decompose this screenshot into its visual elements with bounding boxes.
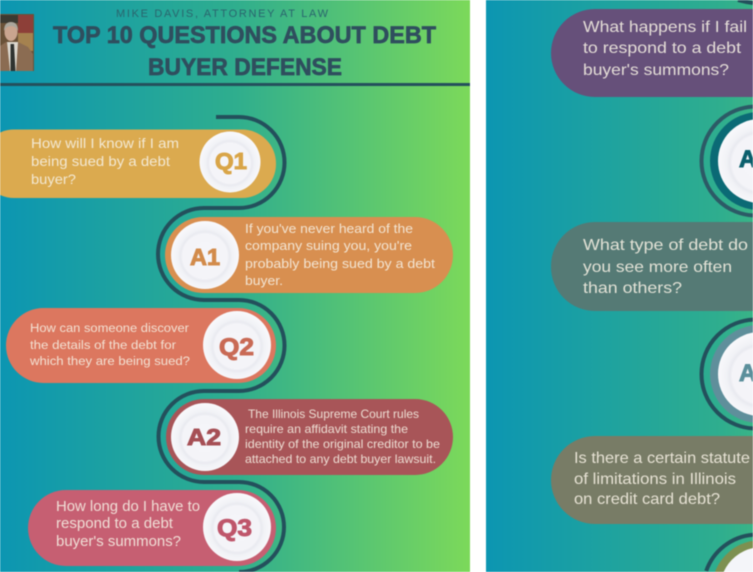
card: A2: A2: [187, 424, 221, 450]
badge: A3 answer circle: [702, 106, 753, 216]
card: Q6 question: Is there a certain statute: [574, 450, 750, 467]
card: A1: If you've never heard of the: [245, 221, 413, 236]
photo: attorney portrait: [0, 14, 34, 71]
card: Q1: How will I know if I am: [31, 135, 179, 151]
connector: winding line: [158, 117, 284, 572]
card: Q2: [6, 308, 276, 383]
card: Q2: Q2: [219, 334, 254, 361]
card: A1: A1: [190, 244, 220, 270]
card: Q6 question: of limitations in Illinois: [574, 471, 736, 488]
card: Q3: buyer's summons?: [56, 534, 181, 550]
title: [53, 22, 436, 81]
card: Q5 question: you see more often: [583, 259, 732, 276]
card: Q1: being sued by a debt: [31, 153, 170, 169]
card: Q1: [0, 130, 276, 198]
card: Q2: How can someone discover: [30, 321, 189, 335]
card: Q3: Q3: [217, 515, 252, 542]
card: A2: The Illinois Supreme Court rules: [248, 408, 419, 421]
card: Q6 question: [551, 436, 753, 524]
card: Q2: the details of the debt for: [30, 338, 176, 352]
card: Q5 question: than others?: [583, 280, 682, 297]
badge: A4 answer circle: [702, 320, 753, 428]
card: Q4 question: to respond to a debt: [583, 40, 742, 57]
card: Q6 question: on credit card debt?: [574, 491, 720, 508]
card: Q2: which they are being sued?: [29, 354, 190, 368]
card: A1: company suing you, you're: [245, 238, 412, 253]
card: Q3: respond to a debt: [56, 516, 173, 532]
header: attorney name: MIKE DAVIS, ATTORNEY AT LAW: [116, 8, 329, 20]
card: Q4 question: What happens if I fail: [583, 19, 747, 36]
card: Q4 question: [551, 9, 753, 97]
connector: top right curve: [738, 0, 753, 3]
card: A2: require an affidavit stating the: [245, 423, 408, 436]
card: A1: [165, 217, 453, 293]
card: Q1: buyer?: [31, 171, 76, 187]
card: A2: identity of the original creditor to be: [245, 438, 440, 451]
badge: A5 answer circle: [706, 535, 753, 572]
title: BUYER DEFENSE: [148, 54, 342, 81]
card: Q5 question: What type of debt do: [583, 237, 748, 254]
panel: right infographic background: [486, 0, 753, 572]
title: TOP 10 QUESTIONS ABOUT DEBT: [53, 22, 436, 49]
card: A1: buyer.: [245, 273, 283, 288]
card: Q3: How long do I have to: [56, 499, 200, 515]
card: A1: probably being sued by a debt: [245, 256, 435, 271]
card: Q5 question: [551, 222, 753, 311]
card: Q1: Q1: [215, 148, 247, 174]
card: Q4 question: buyer's summons?: [583, 62, 729, 79]
card: A2: attached to any debt buyer lawsuit.: [245, 453, 436, 466]
card: Q3: [28, 490, 276, 566]
card: A2: [166, 399, 453, 475]
header divider rule: [0, 83, 470, 86]
panel: left infographic background: [0, 0, 470, 572]
